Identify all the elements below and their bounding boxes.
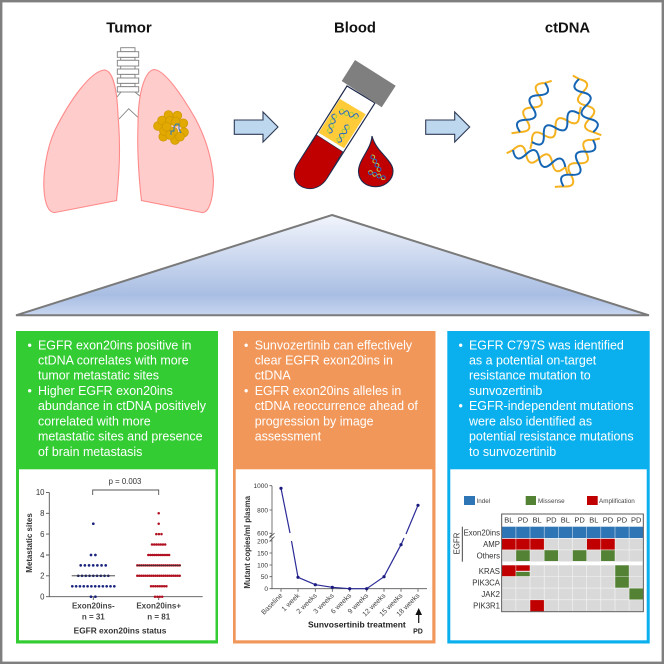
chart: mutation heatmap: BL (589, 516, 598, 525)
arrow: blood to ctDNA (426, 112, 470, 142)
chart: mutant copies line chart: 1000 (254, 483, 268, 490)
chart: mutation heatmap: Others (477, 552, 500, 560)
chart: metastatic sites scatter plot: 8 (40, 509, 44, 518)
icon: ctDNA helices (506, 72, 601, 194)
text block: orange panel bullets: • (244, 384, 248, 398)
chart: mutant copies line chart: 6 weeks (330, 592, 353, 616)
chart: mutation heatmap: PD (603, 516, 614, 525)
heading: Tumor: Tumor (106, 20, 152, 36)
text block: blue panel bullets: potential resistance mutations (469, 430, 634, 444)
chart: mutation heatmap: PIK3R1 (473, 602, 500, 611)
text block: blue panel bullets: EGFR-independent mutations (469, 399, 634, 413)
icon: tumor cell cluster (154, 111, 188, 144)
icon: blood drop with DNA (358, 136, 393, 187)
chart: mutation heatmap: AMP (483, 540, 500, 549)
legend: mutation types: Missense (538, 498, 565, 505)
text block: blue panel bullets (458, 338, 634, 459)
chart: metastatic sites scatter plot: Exon20ins- (72, 602, 115, 611)
legend: mutation types (464, 496, 635, 505)
text block: green panel bullets: EGFR exon20ins positive in (38, 338, 192, 352)
text block: orange panel bullets: assessment (255, 430, 322, 444)
text block: orange panel bullets (244, 338, 418, 444)
chart: metastatic sites scatter plot: p = 0.003 (109, 477, 141, 486)
chart: mutation heatmap: BL (561, 516, 570, 525)
dots: exon20ins negative (72, 524, 115, 597)
chart: mutant copies line chart: 200 (257, 538, 268, 545)
chart: mutation heatmap: PD (546, 516, 557, 525)
chart: mutation heatmap (452, 514, 643, 612)
chart: mutant copies line chart: 50 (261, 574, 268, 581)
chart: mutant copies line chart: 3 weeks (313, 592, 336, 616)
icon: tube cap (342, 60, 396, 107)
heading: ctDNA: ctDNA (545, 20, 590, 36)
text block: orange panel bullets: EGFR exon20ins alleles in (255, 384, 401, 398)
chart: metastatic sites scatter plot: 6 (40, 530, 44, 539)
chart: mutation heatmap: BL (504, 516, 513, 525)
legend: mutation types: Indel (476, 498, 490, 505)
text block: blue panel bullets: sunvozertinib (469, 384, 542, 398)
chart: mutant copies line chart: Baseline (260, 592, 284, 616)
text block: orange panel bullets: progression by image (255, 414, 374, 428)
triangle: zoom from ctDNA to findings (16, 215, 649, 315)
chart: metastatic sites scatter plot: 2 (40, 572, 44, 581)
chart: mutation heatmap: Exon20ins (464, 528, 500, 538)
text block: green panel bullets: • (28, 384, 32, 398)
text block: blue panel bullets: EGFR C797S was identified (469, 338, 624, 352)
text block: orange panel bullets: ctDNA reoccurrence ahead of (255, 399, 418, 413)
text block: green panel bullets: abundance in ctDNA positively (38, 399, 207, 413)
text block: blue panel bullets: were also identified as (468, 414, 592, 428)
chart: mutation heatmap: PD (631, 516, 642, 525)
chart: metastatic sites scatter plot: n = 31 (82, 612, 105, 622)
chart: metastatic sites scatter plot: 10 (36, 488, 45, 497)
icon: tube blood layer (294, 135, 343, 189)
text block: green panel bullets: • (28, 338, 32, 352)
text block: green panel bullets: metastatic sites and presence (38, 430, 203, 444)
chart: metastatic sites scatter plot: n = 81 (147, 612, 171, 622)
icon: left lung (44, 70, 120, 213)
text block: orange panel bullets: clear EGFR exon20ins in (255, 354, 393, 368)
chart: metastatic sites scatter plot: Metastatic sites (25, 513, 34, 573)
text block: green panel bullets: correlated with more (38, 414, 151, 428)
chart: mutant copies line chart: 100 (257, 562, 268, 569)
chart: mutation heatmap: KRAS (479, 567, 500, 576)
chart: mutation heatmap: JAK2 (481, 590, 500, 599)
dots: exon20ins positive (137, 513, 181, 597)
text block: green panel bullets: ctDNA correlates with more (38, 354, 189, 368)
chart: mutation heatmap: EGFR (452, 532, 462, 554)
icon: trachea (117, 48, 141, 119)
arrow: progression marker (415, 608, 422, 623)
legend: mutation types: Amplification (599, 498, 635, 505)
chart: mutant copies line chart: PD (413, 628, 423, 636)
chart: metastatic sites scatter plot: 0 (40, 592, 45, 602)
text block: orange panel bullets: Sunvozertinib can effectively (255, 338, 413, 352)
chart: metastatic sites scatter plot (25, 477, 203, 635)
icon: lungs with tumor (44, 48, 213, 213)
chart: mutation heatmap: PD (574, 516, 585, 525)
text block: blue panel bullets: resistance mutation to (469, 369, 591, 383)
text block: blue panel bullets: as a potential on-target (469, 354, 597, 368)
chart: mutation heatmap: PIK3CA (472, 578, 501, 588)
chart: mutant copies line chart (243, 483, 427, 636)
text block: blue panel bullets: • (458, 338, 463, 352)
chart: mutant copies line chart: 9 weeks (347, 592, 370, 616)
panel: ctDNA clearance finding (233, 331, 436, 644)
text block: green panel bullets: Higher EGFR exon20ins (38, 384, 173, 398)
chart: mutant copies line chart: 15 weeks (379, 592, 405, 618)
chart: mutant copies line chart: 150 (257, 550, 268, 557)
text block: green panel bullets: tumor metastatic sites (38, 369, 159, 383)
heading: Blood: Blood (334, 20, 376, 36)
icon: plasma DNA (327, 109, 359, 143)
chart: metastatic sites scatter plot: Exon20ins+ (136, 602, 181, 611)
chart: mutant copies line chart: Mutant copies/ml plasma (243, 495, 252, 589)
icon: right lung (138, 70, 214, 213)
chart: mutant copies line chart: 600 (257, 531, 268, 538)
chart: mutation heatmap: BL (533, 516, 542, 525)
text block: blue panel bullets: to sunvozertinib (469, 445, 556, 459)
chart: mutation heatmap: PD (518, 516, 529, 525)
panel: resistance mutations finding (447, 331, 650, 644)
chart: metastatic sites scatter plot: 4 (40, 551, 45, 560)
panel: metastatic sites finding (16, 331, 218, 644)
text block: orange panel bullets: • (244, 338, 248, 352)
chart: mutant copies line chart: 2 weeks (296, 592, 319, 616)
text block: green panel bullets: of brain metastasis (38, 445, 142, 459)
text block: orange panel bullets: ctDNA (255, 369, 291, 383)
line: plasma mutant copies over time (279, 487, 420, 590)
chart: metastatic sites scatter plot: EGFR exon20ins status (74, 625, 167, 635)
text block: blue panel bullets: • (458, 399, 463, 413)
text block: green panel bullets (28, 338, 207, 459)
chart: mutant copies line chart: 1 week (281, 592, 302, 613)
chart: mutant copies line chart: Sunvosertinib treatment (308, 620, 406, 630)
chart: mutant copies line chart: 800 (257, 507, 268, 514)
icon: blood tube (294, 60, 396, 189)
arrow: tumor to blood (234, 112, 278, 142)
chart: mutant copies line chart: 12 weeks (362, 592, 388, 618)
chart: mutant copies line chart: 0 (264, 586, 268, 593)
icon: plasma layer (319, 99, 366, 148)
chart: mutation heatmap: PD (617, 516, 628, 525)
chart: mutant copies line chart: 18 weeks (396, 592, 422, 618)
